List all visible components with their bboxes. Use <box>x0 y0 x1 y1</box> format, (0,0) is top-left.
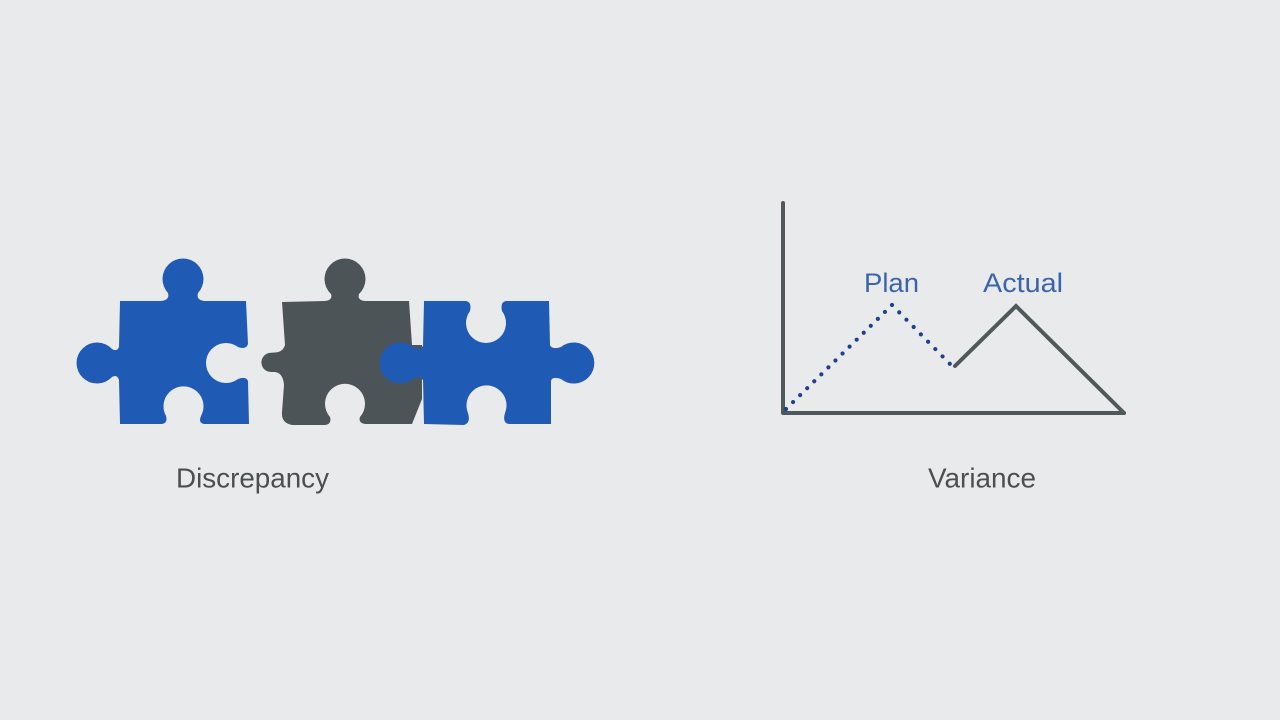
panel: variance chart <box>783 203 1124 494</box>
icon: gray puzzle piece <box>261 259 422 425</box>
label: Actual: Actual <box>983 268 1063 298</box>
label: Discrepancy: Discrepancy <box>176 462 329 494</box>
icon: blue puzzle piece right <box>380 301 594 425</box>
plan line: dotted <box>786 305 950 409</box>
actual line: solid <box>955 306 1124 413</box>
icon: blue puzzle piece left <box>77 259 249 424</box>
chart axes <box>783 203 1124 413</box>
panel: discrepancy puzzle <box>77 259 594 494</box>
label: Variance: Variance <box>928 462 1036 494</box>
label: Plan: Plan <box>864 268 919 298</box>
